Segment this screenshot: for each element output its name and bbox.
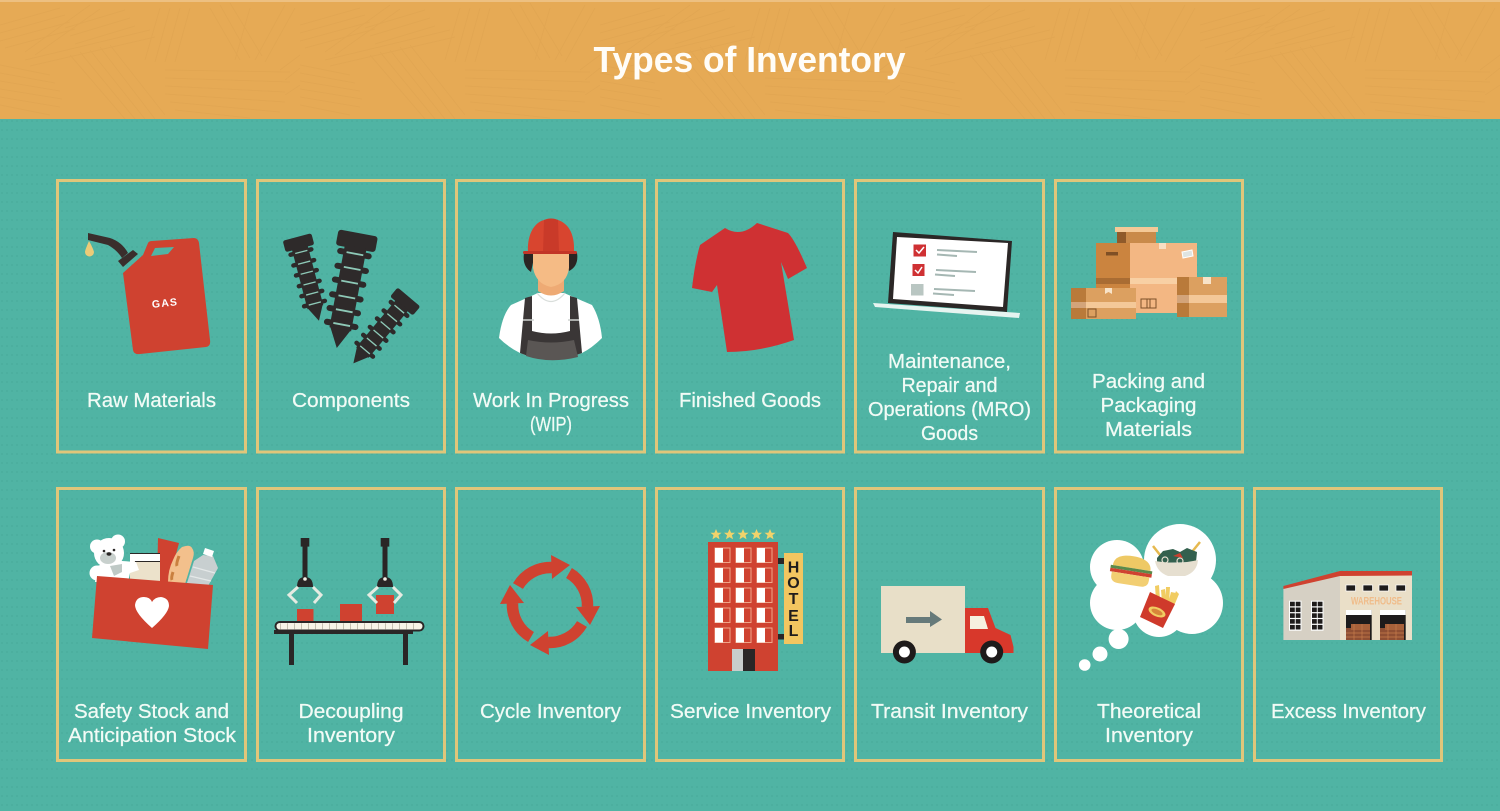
label: Cycle Inventory	[480, 701, 621, 723]
label: Packing and	[1092, 371, 1205, 393]
label: (WIP)	[530, 414, 572, 436]
icon: warehouse: WAREHOUSE	[1351, 596, 1402, 608]
icon: hotel: L	[789, 623, 799, 640]
header band	[0, 0, 1500, 119]
icon: gas can	[85, 233, 210, 354]
panel border	[856, 488, 1044, 760]
panel border	[456, 488, 644, 760]
label: Operations (MRO)	[868, 399, 1031, 421]
label: Inventory	[1105, 725, 1193, 747]
panel border	[656, 180, 844, 452]
label: Work In Progress	[473, 390, 629, 412]
panel: cycle inventory	[456, 488, 644, 760]
label: Materials	[1105, 419, 1192, 441]
panel: finished goods	[656, 180, 844, 452]
panel border	[258, 488, 444, 760]
label: Packaging	[1100, 395, 1196, 417]
icon: delivery truck	[881, 586, 1014, 664]
icon: worker	[499, 218, 602, 360]
label: Transit Inventory	[871, 701, 1028, 723]
icon: gas can: GAS	[151, 296, 179, 311]
icon: screws	[283, 229, 420, 373]
panel: safety stock	[58, 488, 246, 760]
icon: hotel: H	[788, 560, 799, 576]
icon: warehouse	[1283, 571, 1412, 640]
label: Decoupling	[298, 701, 404, 723]
label: Components	[292, 390, 410, 412]
icon: t-shirt	[692, 223, 807, 352]
icon: hotel: T	[789, 591, 799, 608]
panel border	[58, 180, 246, 452]
icon: hotel	[708, 529, 803, 671]
label	[298, 701, 404, 747]
label	[68, 701, 237, 747]
icon: care box	[90, 534, 218, 649]
title: Types of Inventory	[594, 39, 906, 80]
panel: raw materials	[58, 180, 246, 452]
label: Service Inventory	[670, 701, 831, 723]
panel: transit inventory	[856, 488, 1044, 760]
label	[868, 351, 1031, 445]
label	[473, 390, 629, 436]
panel border	[456, 180, 644, 452]
panel border	[1056, 180, 1242, 452]
label: Inventory	[307, 725, 395, 747]
panel border	[258, 180, 444, 452]
label: Excess Inventory	[1271, 701, 1426, 723]
label: Anticipation Stock	[68, 725, 237, 747]
panel: components	[258, 180, 444, 452]
panel border	[656, 488, 844, 760]
icon: cycle arrows	[500, 555, 600, 655]
panel border	[1254, 488, 1442, 760]
label: Maintenance,	[888, 351, 1011, 373]
icon: hotel: E	[788, 608, 799, 625]
panel: excess inventory	[1254, 488, 1442, 760]
panel: decoupling	[258, 488, 444, 760]
panel border	[856, 180, 1044, 452]
label: Raw Materials	[87, 390, 216, 412]
panel border	[58, 488, 246, 760]
icon: cardboard boxes	[1071, 227, 1227, 319]
panel: packing materials	[1056, 180, 1242, 452]
label	[1092, 371, 1205, 441]
icon: conveyor with robot arms	[274, 538, 424, 665]
panel: MRO goods	[856, 180, 1044, 452]
label: Finished Goods	[679, 390, 821, 412]
panel border	[1056, 488, 1242, 760]
icon: laptop checklist	[873, 232, 1020, 318]
icon: hotel: O	[787, 575, 800, 592]
panel: work in progress	[456, 180, 644, 452]
label	[1097, 701, 1201, 747]
panel: theoretical inventory	[1056, 488, 1242, 760]
label: Goods	[921, 423, 978, 445]
label: Theoretical	[1097, 701, 1201, 723]
label: Repair and	[902, 375, 998, 397]
label: Safety Stock and	[74, 701, 229, 723]
icon: thought bubble with food	[1079, 524, 1223, 671]
panel: service inventory	[656, 488, 844, 760]
